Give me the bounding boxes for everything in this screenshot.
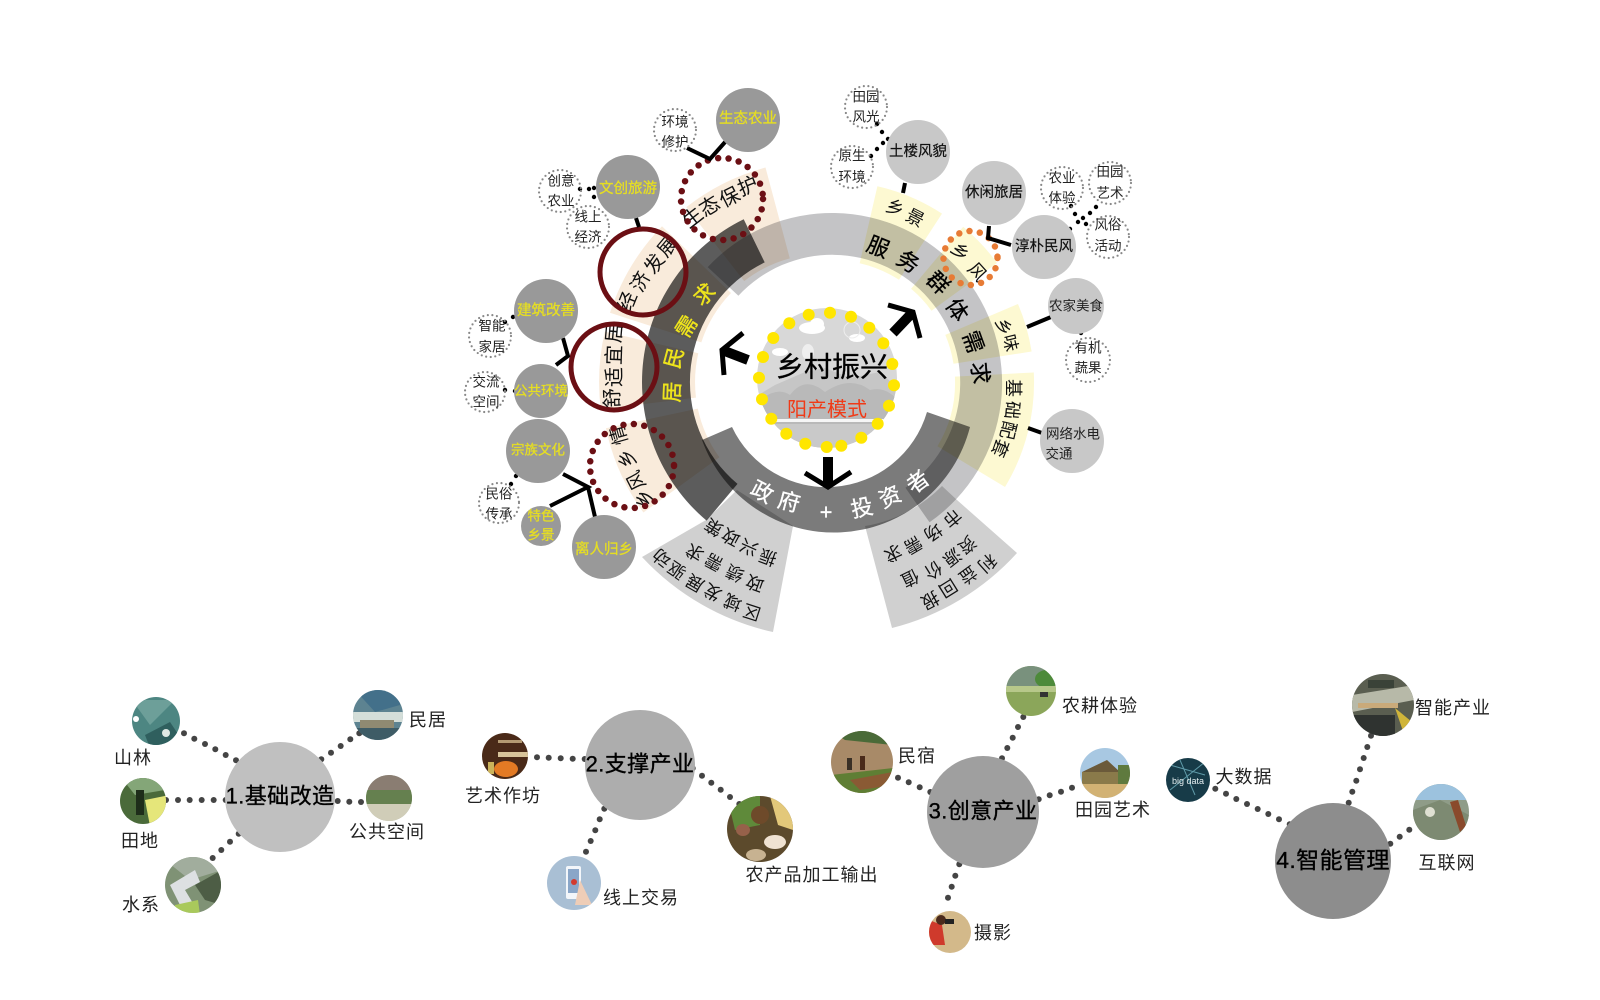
label: 摄影: 摄影 (974, 923, 1012, 943)
label: 山林: 山林 (114, 748, 152, 768)
bubble: 公共环境 (514, 364, 568, 418)
sector text: 乡味: 乡 (991, 316, 1015, 338)
photo: 山林 (132, 697, 180, 745)
sector text: 振兴政策 政绩需求 区域发展驱动: 动 (649, 545, 675, 571)
highlight ring: 经济发展 (600, 229, 686, 315)
ring text: 服务群体需求: 群 (921, 266, 955, 300)
sector text: 舒适宜居: 适 (603, 367, 626, 387)
bubble: 风俗活动: 风俗 (1094, 218, 1122, 232)
photo: 公共空间 (366, 775, 412, 821)
sector text: 舒适宜居: 居 (603, 322, 627, 344)
ring text: 服务群体需求: 体 (941, 294, 973, 326)
bubble: 文创旅游 (596, 155, 660, 219)
photo: 农耕体验 (1006, 666, 1059, 716)
ring text: 服务群体需求 (863, 231, 993, 385)
bubble: 交流空间: 交流 (472, 374, 500, 390)
sector text: 生态保护: 保 (716, 183, 744, 212)
photo: 田地 (120, 778, 166, 824)
label: 农耕体验: 农耕体验 (1062, 696, 1138, 716)
bubble: 田园风光: 田园 (852, 90, 880, 104)
bubble: 生态农业 (716, 88, 780, 152)
sector text: 基础配套: 套 (987, 436, 1013, 460)
bubble: 交流空间: 空间 (472, 394, 500, 410)
node dots (163, 730, 364, 861)
sector text: 基础配套 (987, 379, 1023, 460)
label: 互联网: 互联网 (1418, 853, 1476, 873)
label: 农产品加工输出: 农产品加工输出 (746, 865, 878, 885)
hub circle (1275, 803, 1391, 919)
ring text: 居民需求: 民 (661, 345, 689, 371)
bubble: 土楼风貌: 土楼风貌 (889, 143, 947, 160)
bubble: 风俗活动 (1087, 216, 1129, 258)
highlight dots: 乡风乡情 (590, 424, 674, 508)
photo: 大数据: big data (1172, 776, 1204, 786)
bubble: 淳朴民风 (1012, 215, 1076, 279)
bubble: 智能家居: 智能 (478, 318, 506, 334)
sector: 乡风乡情 (606, 409, 719, 512)
bubble: 宗族文化: 宗族文化 (511, 442, 565, 458)
bubble: 智能家居 (469, 315, 511, 357)
label: 田园艺术: 田园艺术 (1075, 800, 1151, 820)
sector text: 振兴政策 政绩需求 区域发展驱动: 振 (756, 545, 780, 569)
sector text: 经济发展: 经 (614, 289, 642, 315)
ring text: 政府+投资者: 投 (849, 493, 875, 523)
ring text: 居民需求: 居 (661, 381, 685, 403)
photo: 民居 (353, 690, 403, 740)
sector text: 振兴政策 政绩需求 区域发展驱动: 域 (721, 589, 745, 615)
sector text: 乡风乡情 (606, 423, 659, 512)
ring text: 政府+投资者: + (820, 500, 832, 524)
node dots (1212, 733, 1412, 847)
sector text: 市场需求 资源价值 利益回报: 报 (918, 587, 942, 613)
bubble: 农家美食 (1048, 278, 1104, 334)
sector: 乡味 (945, 304, 1032, 364)
sector text: 振兴政策 政绩需求 区域发展驱动: 需 (702, 549, 726, 575)
label: 田地: 田地 (121, 831, 159, 851)
sector text: 振兴政策 政绩需求 区域发展驱动: 发 (701, 579, 725, 605)
sector: 舒适宜居 (599, 332, 698, 409)
sector text: 市场需求 资源价值 利益回报 (881, 505, 1000, 613)
bubble: 创意农业: 农业 (548, 194, 574, 208)
bubble: 农业体验 (1041, 167, 1083, 209)
label: 大数据: 大数据 (1216, 767, 1272, 787)
bubble: 田园风光 (845, 86, 887, 128)
sector text: 生态保护: 护 (734, 172, 761, 201)
bubble: 农业体验: 体验 (1048, 190, 1076, 206)
sector text: 振兴政策 政绩需求 区域发展驱动: 展 (682, 570, 708, 596)
arrow: down (805, 457, 851, 487)
bubble: 休闲旅居 (962, 161, 1026, 225)
bubble: 田园艺术: 艺术 (1096, 186, 1124, 200)
sector text: 乡风乡情: 乡 (614, 445, 641, 471)
bubble: 农家美食: 农家美食 (1049, 298, 1103, 314)
label: 公共空间: 公共空间 (349, 822, 425, 842)
sector text: 经济发展 (614, 232, 683, 315)
bubble: 特色乡景 (521, 506, 561, 546)
sector text: 乡风乡情: 风 (623, 467, 651, 493)
ring text: 服务群体需求: 求 (967, 361, 993, 385)
label: 民宿: 民宿 (898, 746, 936, 766)
sector text: 市场需求 资源价值 利益回报: 值 (898, 565, 922, 591)
photo: 摄影 (929, 911, 971, 953)
bubble: 离人归乡 (572, 515, 636, 579)
bubble: 有机蔬果: 有机 (1074, 340, 1102, 356)
bubble: 环境修护 (654, 109, 696, 151)
ring text: 服务群体需求: 务 (892, 246, 924, 278)
hub circle (225, 742, 335, 852)
label: 智能产业: 智能产业 (1415, 698, 1491, 718)
bubble: 文创旅游: 文创旅游 (599, 180, 657, 197)
ring text: 居民需求: 需 (672, 312, 702, 342)
ring: 服务群体需求 (708, 213, 1002, 522)
title: 乡村振兴: 乡村振兴 (776, 352, 888, 382)
bubble: 田园风光: 风光 (852, 110, 880, 124)
photo: 智能产业 (1352, 674, 1414, 736)
label: 民居: 民居 (409, 710, 447, 730)
sector text: 乡景 (883, 195, 928, 231)
hub text: 3.创意产业 (929, 798, 1037, 824)
sector text: 乡景: 景 (902, 205, 928, 231)
sector text: 乡风: 乡 (947, 239, 973, 265)
ring: 政府+投资者 (702, 412, 970, 533)
label: 水系: 水系 (122, 895, 160, 915)
subtitle: 阳产模式: 阳产模式 (787, 398, 867, 421)
sector text: 乡味 (991, 316, 1021, 354)
photo: 线上交易 (546, 855, 602, 911)
label: 艺术作坊: 艺术作坊 (465, 786, 541, 806)
photo: 大数据 (1166, 758, 1210, 802)
sector: 经济发展 (610, 226, 731, 342)
sector text: 振兴政策 政绩需求 区域发展驱动: 绩 (723, 560, 747, 586)
bubble: 生态农业: 生态农业 (719, 110, 777, 127)
sector: 政府需求 (642, 490, 793, 632)
photo: 水系 (165, 857, 221, 913)
bubble: 线上经济: 经济 (574, 230, 602, 244)
arrow: up right (888, 305, 920, 338)
sector text: 舒适宜居 (601, 322, 627, 408)
hub circle (927, 756, 1039, 868)
sector text: 舒适宜居: 宜 (603, 345, 626, 365)
hub circle (585, 710, 695, 820)
radial diagram (465, 86, 1131, 632)
cluster 4: 智能管理 (1166, 674, 1491, 919)
bubble: 特色乡景: 乡景 (528, 528, 554, 542)
sector text: 经济发展: 发 (640, 250, 670, 278)
highlight dots: 乡风 (944, 231, 998, 285)
sector text: 生态保护 (678, 172, 761, 233)
bubble: 网络水电交通 (1040, 409, 1104, 473)
bubble: 民俗传承 (479, 483, 519, 523)
bubble: 网络水电交通: 网络水电 (1046, 426, 1100, 442)
bubble: 特色乡景: 特色 (528, 508, 554, 524)
bubble: 田园艺术: 田园 (1096, 164, 1124, 180)
cluster 3: 创意产业 (831, 666, 1151, 953)
ring text: 服务群体需求: 需 (957, 327, 989, 357)
bubble: 休闲旅居: 休闲旅居 (965, 184, 1023, 201)
sector text: 市场需求 资源价值 利益回报: 求 (881, 540, 905, 566)
sector text: 乡风 (947, 239, 990, 285)
photo: 互联网 (1413, 784, 1469, 840)
bubble: 土楼风貌 (886, 120, 950, 184)
sector text: 经济发展: 展 (653, 232, 683, 262)
sector text: 基础配套: 基 (1003, 379, 1023, 397)
bubble: 农业体验: 农业 (1048, 170, 1076, 186)
center emblem (753, 306, 900, 453)
sector text: 市场需求 资源价值 利益回报: 资 (954, 532, 980, 558)
sector text: 乡味: 味 (999, 332, 1021, 354)
bubble: 民俗传承: 民俗 (486, 486, 513, 502)
sector text: 市场需求 资源价值 利益回报: 源 (939, 544, 965, 570)
ring text: 居民需求 (661, 279, 720, 403)
bubble: 线上经济 (567, 206, 609, 248)
sector text: 振兴政策 政绩需求 区域发展驱动 (649, 514, 780, 624)
photo: 田园艺术 (1080, 748, 1130, 798)
bubble: 线上经济: 线上 (574, 210, 602, 224)
cluster 2: 支撑产业 (465, 710, 878, 911)
bubble: 创意农业 (539, 170, 581, 212)
bubble: 环境修护: 环境 (662, 114, 688, 130)
sector text: 乡景: 乡 (883, 195, 907, 221)
sector text: 市场需求 资源价值 利益回报: 利 (974, 550, 1000, 576)
bubble: 原生环境: 环境 (838, 170, 866, 184)
sector text: 基础配套: 础 (1001, 400, 1023, 420)
photo: 艺术作坊 (482, 733, 528, 779)
sector text: 振兴政策 政绩需求 区域发展驱动: 驱 (664, 557, 690, 583)
ring text: 政府+投资者: 者 (902, 465, 934, 499)
emblem dots (753, 307, 900, 453)
bubble: 建筑改善: 建筑改善 (517, 302, 575, 319)
bubble: 建筑改善 (514, 279, 578, 343)
sector: 基础配套 (937, 372, 1034, 487)
sector text: 振兴政策 政绩需求 区域发展驱动: 政 (719, 524, 743, 550)
bubble: 网络水电交通: 交通 (1046, 446, 1073, 462)
sector text: 基础配套: 配 (996, 419, 1020, 441)
sector text: 市场需求 资源价值 利益回报: 价 (920, 557, 946, 583)
sector text: 舒适宜居: 舒 (601, 388, 624, 408)
ring text: 政府+投资者 (746, 465, 934, 524)
sector text: 振兴政策 政绩需求 区域发展驱动: 政 (743, 571, 767, 595)
sector: 生态保护 (686, 168, 790, 281)
bubble: 田园艺术 (1089, 162, 1131, 204)
highlight ring: 舒适宜居 (571, 324, 657, 410)
ring text: 居民需求: 求 (690, 279, 720, 311)
sector text: 市场需求 资源价值 利益回报: 场 (920, 519, 946, 545)
sector text: 市场需求 资源价值 利益回报: 需 (900, 532, 926, 558)
sector text: 生态保护: 态 (695, 192, 724, 222)
sector: 乡景 (860, 186, 942, 280)
bubble: 民俗传承: 传承 (486, 506, 513, 522)
ring: 居民需求 (642, 219, 765, 521)
emblem picture (757, 308, 897, 448)
bubble: 公共环境: 公共环境 (514, 384, 568, 398)
sector: 乡风 (911, 227, 997, 311)
hub text: 1.基础改造 (226, 784, 334, 808)
sector text: 振兴政策 政绩需求 区域发展驱动: 区 (741, 600, 763, 624)
ring text: 政府+投资者: 府 (775, 487, 803, 517)
bubble: 风俗活动: 活动 (1094, 238, 1122, 254)
bubble: 原生环境: 原生 (838, 148, 866, 164)
bubble: 宗族文化 (506, 419, 570, 483)
photo: 农产品加工输出 (727, 796, 793, 862)
cluster 1: 基础改造 (114, 688, 447, 915)
node dots (534, 754, 742, 855)
bubble: 淳朴民风: 淳朴民风 (1015, 237, 1073, 255)
connector lines (550, 141, 1051, 517)
sector text: 乡风乡情: 情 (606, 423, 633, 447)
ring text: 政府+投资者: 资 (875, 481, 905, 513)
sector text: 生态保护: 生 (678, 202, 708, 233)
ring text: 政府+投资者: 政 (746, 476, 778, 508)
sector text: 市场需求 资源价值 利益回报: 回 (935, 575, 961, 601)
sector text: 乡风: 风 (964, 259, 990, 285)
node dots (895, 714, 1075, 901)
connector dots (503, 122, 1098, 486)
arrow: left (722, 333, 748, 375)
sector text: 市场需求 资源价值 利益回报: 市 (939, 505, 965, 531)
bubble: 创意农业: 创意 (548, 172, 574, 188)
label: 线上交易: 线上交易 (603, 888, 679, 908)
sector text: 乡风乡情: 乡 (630, 484, 659, 512)
bubble: 有机蔬果 (1066, 338, 1110, 382)
hub text: 2.支撑产业 (586, 752, 694, 776)
sector text: 振兴政策 政绩需求 区域发展驱动: 兴 (737, 534, 761, 560)
sector text: 经济发展: 济 (627, 268, 655, 296)
hub text: 4.智能管理 (1276, 847, 1390, 873)
photo: 民宿 (831, 731, 893, 793)
bubble: 有机蔬果: 蔬果 (1074, 360, 1102, 376)
sector text: 市场需求 资源价值 利益回报: 益 (955, 562, 981, 588)
highlight dots: 生态保护 (681, 158, 763, 240)
sector text: 振兴政策 政绩需求 区域发展驱动: 策 (701, 514, 727, 540)
bubble: 离人归乡: 离人归乡 (575, 541, 633, 558)
bubble: 原生环境 (831, 146, 873, 188)
sector: 投资者需求 (865, 486, 1017, 628)
bubble: 交流空间 (465, 372, 505, 412)
bubble: 环境修护: 修护 (662, 134, 688, 150)
ring text: 服务群体需求: 服 (863, 231, 893, 263)
sector text: 振兴政策 政绩需求 区域发展驱动: 求 (682, 539, 708, 565)
bubble: 智能家居: 家居 (478, 338, 506, 354)
